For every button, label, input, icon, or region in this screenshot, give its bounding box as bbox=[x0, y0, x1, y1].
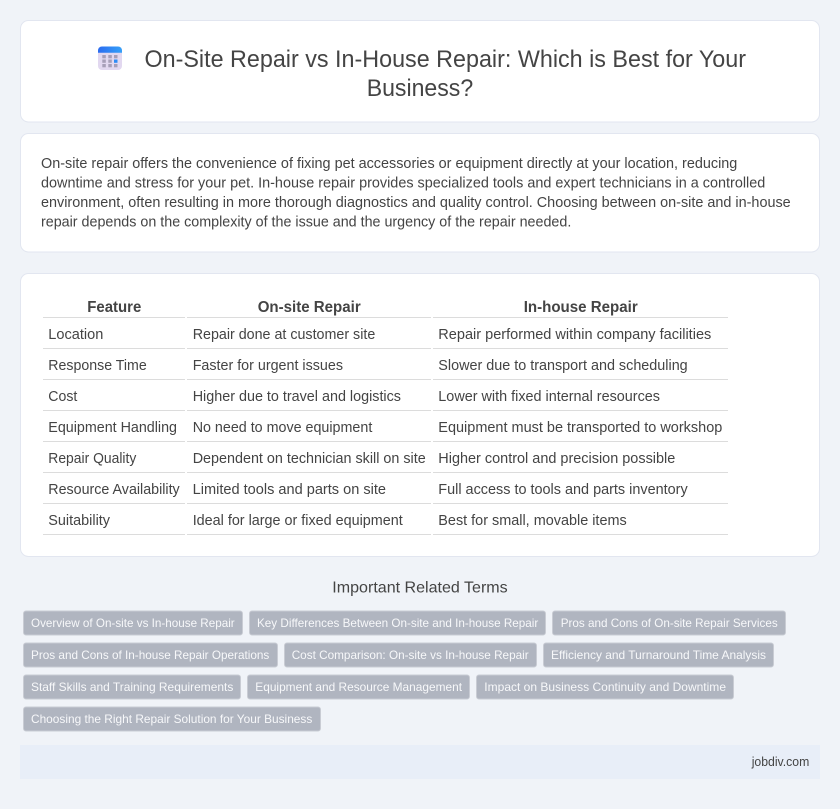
table header bbox=[43, 299, 728, 318]
title: On-Site Repair vs In-House Repair: Which is Best for Your bbox=[144, 46, 746, 73]
intro text: environment, often resulting in more thorough diagnostics and quality control. Choosing between on-site and in-house bbox=[41, 195, 791, 211]
tag bbox=[544, 643, 774, 667]
row: Location: Repair done at customer site bbox=[193, 327, 375, 343]
tag bbox=[248, 675, 470, 699]
tag: Staff Skills and Training Requirements bbox=[31, 680, 233, 694]
tag bbox=[476, 675, 734, 699]
row: Suitability: Suitability bbox=[48, 513, 111, 529]
row: Response Time bbox=[43, 358, 728, 380]
tag bbox=[24, 643, 278, 667]
row: Location bbox=[43, 327, 728, 349]
tag: Equipment and Resource Management bbox=[255, 680, 463, 694]
row: Cost: Lower with fixed internal resources bbox=[438, 389, 660, 405]
row: Repair Quality: Repair Quality bbox=[48, 451, 137, 467]
row: Repair Quality: Dependent on technician skill on site bbox=[193, 451, 426, 467]
tag: Efficiency and Turnaround Time Analysis bbox=[551, 648, 766, 662]
row: Equipment Handling: Equipment must be transported to workshop bbox=[438, 420, 722, 436]
footer: jobdiv.com bbox=[751, 754, 809, 769]
table header: In-house Repair bbox=[524, 299, 638, 316]
row: Resource Availability: Full access to tools and parts inventory bbox=[438, 482, 688, 498]
tag: Cost Comparison: On-site vs In-house Repair bbox=[292, 648, 529, 662]
row: Suitability: Best for small, movable items bbox=[438, 513, 627, 529]
title: Business? bbox=[367, 75, 473, 102]
tag bbox=[284, 643, 536, 667]
row: Resource Availability: Resource Availability bbox=[48, 482, 180, 498]
table header: Feature bbox=[87, 299, 141, 316]
footer bbox=[20, 745, 820, 779]
tag: Overview of On-site vs In-house Repair bbox=[31, 616, 235, 630]
heading: related terms: Important Related Terms bbox=[332, 580, 508, 597]
title bbox=[144, 46, 746, 102]
panel: header bbox=[20, 20, 820, 122]
row: Response Time: Faster for urgent issues bbox=[193, 358, 343, 374]
row: Equipment Handling: Equipment Handling bbox=[48, 420, 177, 436]
row: Location: Repair performed within company facilities bbox=[438, 327, 711, 343]
tag bbox=[24, 707, 320, 731]
row: Cost: Cost bbox=[48, 389, 77, 405]
panel: comparison table bbox=[20, 274, 820, 556]
tag bbox=[24, 675, 240, 699]
row: Resource Availability: Limited tools and parts on site bbox=[193, 482, 386, 498]
intro text bbox=[41, 156, 791, 230]
tag bbox=[24, 611, 242, 635]
row: Response Time: Slower due to transport and scheduling bbox=[438, 358, 688, 374]
tag bbox=[552, 611, 786, 635]
intro text: On-site repair offers the convenience of fixing pet accessories or equipment directly at your location, reducing bbox=[41, 156, 737, 172]
tag: Pros and Cons of In-house Repair Operations bbox=[31, 648, 269, 662]
row: Repair Quality bbox=[43, 451, 728, 473]
table header: On-site Repair bbox=[258, 299, 361, 316]
row: Suitability: Ideal for large or fixed equipment bbox=[193, 513, 403, 529]
related terms tags bbox=[24, 611, 786, 731]
row: Location: Location bbox=[48, 327, 103, 343]
row: Cost bbox=[43, 389, 728, 411]
row: Repair Quality: Higher control and precision possible bbox=[438, 451, 675, 467]
tag bbox=[250, 611, 546, 635]
intro text: repair depends on the complexity of the issue and the urgency of the repair needed. bbox=[41, 214, 571, 230]
row: Resource Availability bbox=[43, 482, 728, 504]
tag: Choosing the Right Repair Solution for Your Business bbox=[31, 712, 312, 726]
panel: introduction bbox=[20, 134, 820, 252]
intro text: downtime and stress for your pet. In-house repair provides specialized tools and expert technicians in a controlled bbox=[41, 176, 765, 192]
row: Cost: Higher due to travel and logistics bbox=[193, 389, 401, 405]
tag: Pros and Cons of On-site Repair Services bbox=[561, 616, 778, 630]
row: Response Time: Response Time bbox=[48, 358, 147, 374]
row: Equipment Handling bbox=[43, 420, 728, 442]
icon: calendar bbox=[98, 46, 122, 70]
tag: Key Differences Between On-site and In-house Repair bbox=[257, 616, 538, 630]
tag: Impact on Business Continuity and Downtime bbox=[484, 680, 726, 694]
row: Suitability bbox=[43, 513, 728, 535]
row: Equipment Handling: No need to move equipment bbox=[193, 420, 372, 436]
